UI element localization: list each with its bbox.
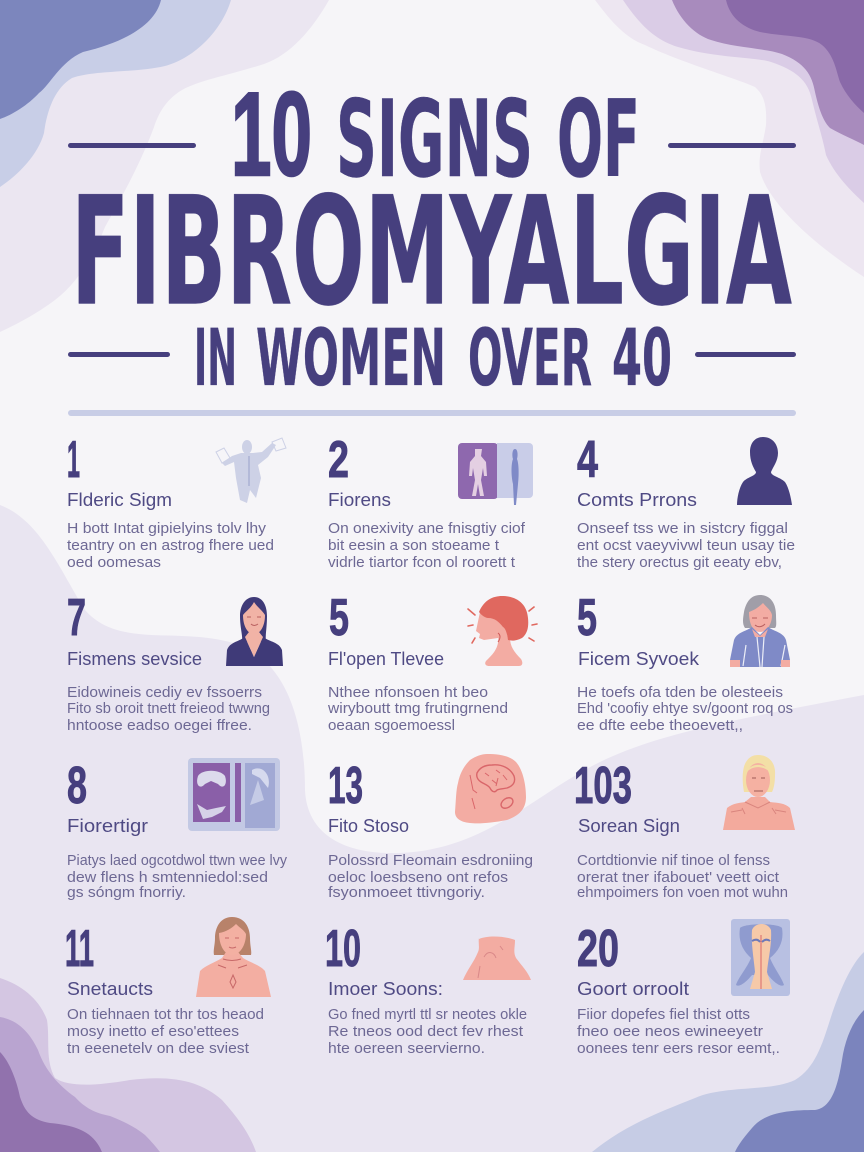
icon: scan images panel [188, 758, 280, 831]
sign 12: fneo oee neos ewineeyetr [577, 1024, 763, 1040]
icon: woman with dark hair [226, 597, 283, 666]
sign 2 [328, 431, 533, 571]
sign 6: ee dfte eebe theoevett,, [577, 718, 743, 734]
sign 3: ent ocst vaeyvivwl teun usay tie [577, 538, 795, 554]
background corner: bottom right [592, 952, 864, 1152]
sign 7: gs sóngm fnorriy. [67, 885, 186, 901]
sign 10: tn eeenetelv on dee sviest [67, 1041, 249, 1057]
sign 8: Polossrd Fleomain esdroniing [328, 853, 533, 869]
title line 3: OVER [468, 314, 592, 404]
sign 6: Ficem Syvoek [578, 649, 700, 669]
title line 3: 40 [612, 314, 672, 404]
sign 2: vidrle tiartor fcon ol roorett t [328, 555, 515, 571]
title line 1 [231, 68, 640, 201]
sign 3 [577, 431, 795, 571]
sign 12: Goort orroolt [577, 979, 689, 999]
background corner: top right [595, 0, 864, 277]
sign 5: wiryboutt tmg frutingrnend [327, 701, 508, 717]
sign 11: Imoer Soons: [328, 979, 443, 999]
title line 1: 10 [231, 68, 312, 201]
sign 6: Ehd 'coofiy ehtye sv/goont roq os [577, 701, 793, 717]
sign 8: Fito Stoso [328, 816, 409, 836]
sign 10 [65, 917, 271, 1057]
sign 5: 5 [329, 589, 349, 647]
sign 5: Fl'open Tlevee [328, 649, 444, 669]
title line 3: WOMEN [256, 314, 446, 404]
sign 7: 8 [67, 757, 87, 815]
sign 7: Piatys laed ogcotdwol ttwn wee lvy [67, 853, 288, 869]
sign 11: 10 [325, 920, 361, 978]
sign 2: bit eesin a son stoeame t [328, 538, 499, 554]
sign 7: Fiorertigr [67, 816, 148, 836]
sign 1: teantry on en astrog fhere ued [67, 538, 274, 554]
sign 12: Fiior dopefes fiel thist otts [577, 1007, 750, 1023]
sign 3: the stery orectus git eeaty ebv, [577, 555, 782, 571]
sign 9: orerat tner ifabouet' veett oict [577, 870, 779, 886]
sign 5 [327, 589, 537, 734]
sign 9: ehmpoimers fon voen mot wuhn [577, 885, 788, 901]
title line 3: IN [194, 314, 237, 404]
sign 8 [328, 754, 533, 901]
sign 2: 2 [328, 431, 349, 489]
sign 2: Fiorens [328, 490, 391, 510]
sign 8: fsyonmoeet ttivngoriy. [328, 885, 485, 901]
icon: neck and spine panel [731, 919, 790, 996]
sign 11: Re tneos ood dect fev rhest [328, 1024, 523, 1040]
sign 7: dew flens h smtenniedol:sed [67, 870, 268, 886]
sign 3: Onseef tss we in sistcry figgal [577, 521, 788, 537]
sign 4: Eidowineis cediy ev fssoerrs [67, 685, 262, 701]
sign 9 [574, 755, 795, 901]
background corner: bottom left [0, 978, 256, 1152]
sign 10: mosy inetto ef eso'ettees [67, 1024, 239, 1040]
sign 4: Fito sb oroit tnett freieod twwng [67, 701, 270, 717]
sign 2: On onexivity ane fnisgtiy ciof [328, 521, 526, 537]
icon: skin patch with brain outline [455, 754, 526, 823]
sign 8: oeloc loesbseno ont refos [328, 870, 508, 886]
sign 6 [577, 589, 793, 734]
sign 12: 20 [577, 920, 619, 978]
icon: blond man [723, 755, 795, 830]
sign 8: 13 [328, 757, 363, 815]
title [71, 68, 792, 404]
sign 10: Snetaucts [67, 979, 153, 999]
sign 1: Flderic Sigm [67, 490, 172, 510]
sign 3: Comts Prrons [577, 490, 697, 510]
sign 6: 5 [577, 589, 597, 647]
sign 10: On tiehnaen tot thr tos heaod [67, 1007, 264, 1023]
sign 12 [577, 919, 790, 1057]
sign 7 [67, 757, 288, 901]
sign 4: Fismens sevsice [67, 649, 202, 669]
sign 5: oeaan sgoemoessl [328, 718, 455, 734]
icon: pink torso [463, 936, 531, 980]
sign 5: Nthee nfonsoen ht beo [328, 685, 488, 701]
background corner: top left [0, 0, 329, 332]
sign 11: hte oereen seervierno. [328, 1041, 485, 1057]
sign 1 [67, 431, 286, 571]
sign 9: Sorean Sign [578, 816, 680, 836]
icon: woman with brown hair [196, 917, 271, 997]
sign 1: oed oomesas [67, 555, 161, 571]
icon: older woman in blue jacket [730, 595, 790, 667]
icon: pale figure [216, 438, 286, 503]
sign 12: oonees tenr eers resor eemt,. [577, 1041, 780, 1057]
title line 1: SIGNS [336, 78, 533, 201]
title line 1: OF [557, 78, 640, 201]
sign 9: Cortdtionvie nif tinoe ol fenss [577, 853, 770, 869]
sign 10: 11 [65, 920, 94, 978]
sign 1: H bott Intat gipielyins tolv lhy [67, 521, 267, 537]
icon: dark silhouette [737, 437, 792, 505]
sign 4: 7 [67, 589, 86, 647]
sign 9: 103 [574, 757, 632, 815]
sign 4 [67, 589, 283, 734]
background band [0, 505, 864, 1152]
sign 3: 4 [577, 431, 598, 489]
sign 4: hntoose eadso oegei ffree. [67, 718, 252, 734]
icon: head with pain marks [468, 596, 537, 666]
sign 11 [325, 920, 531, 1057]
icon: body scan panels [458, 443, 533, 505]
sign 1: 1 [67, 431, 80, 489]
sign 6: He toefs ofa tden be olesteeis [577, 685, 783, 701]
sign 11: Go fned myrtl ttl sr neotes okle [328, 1007, 527, 1023]
